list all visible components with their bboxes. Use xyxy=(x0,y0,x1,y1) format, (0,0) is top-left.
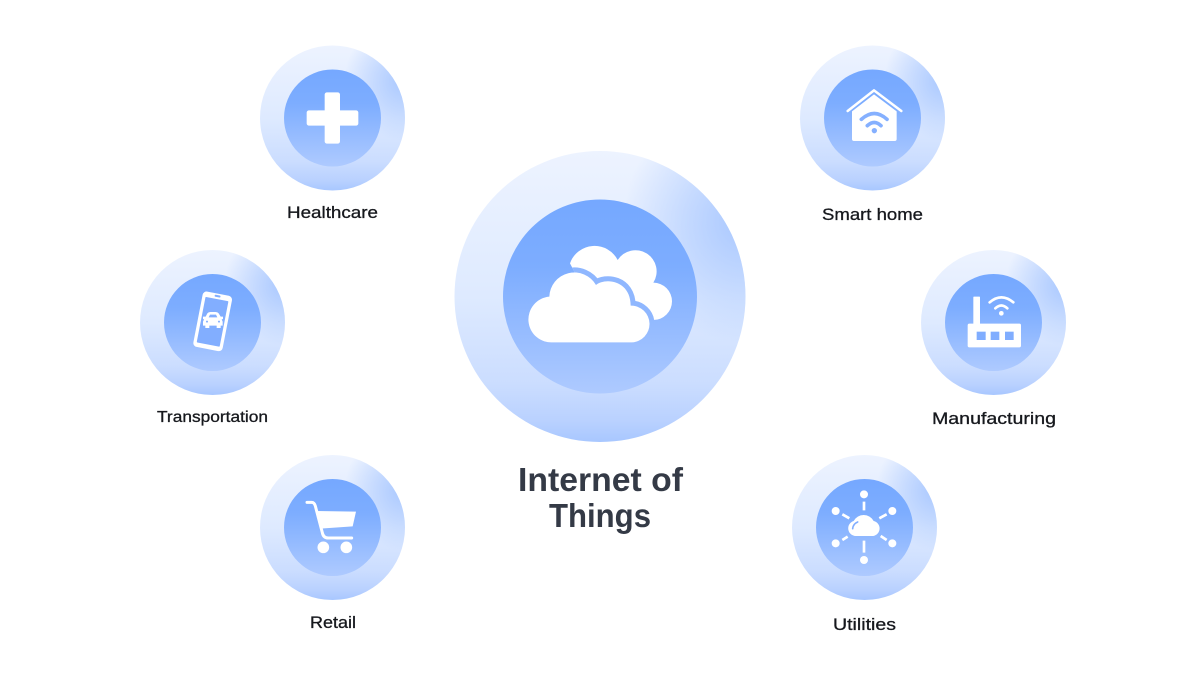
badge xyxy=(140,250,285,395)
badge xyxy=(260,46,405,190)
label: Utilities xyxy=(833,615,896,634)
panel: Smart home xyxy=(800,46,945,224)
icon: shopping cart xyxy=(307,502,356,553)
panel: Internet of Things hub xyxy=(454,151,746,534)
panel: Healthcare xyxy=(260,46,405,222)
label: Transportation xyxy=(157,409,268,426)
icon: phone with car xyxy=(193,291,233,352)
label: Retail xyxy=(310,613,356,632)
title: Internet of xyxy=(518,461,684,498)
panel: Manufacturing xyxy=(921,250,1066,428)
badge xyxy=(792,455,937,600)
icon: medical cross xyxy=(307,92,358,144)
title xyxy=(518,461,684,534)
label: Manufacturing xyxy=(932,409,1056,428)
badge xyxy=(800,46,945,190)
hub outer circle xyxy=(454,151,746,442)
icon: cloud network xyxy=(832,490,896,564)
icon: house with wifi xyxy=(848,90,901,141)
badge xyxy=(260,455,405,600)
panel: Retail xyxy=(260,455,405,632)
label: Smart home xyxy=(822,205,923,224)
badge xyxy=(921,250,1066,395)
panel: Utilities xyxy=(792,455,937,634)
label: Healthcare xyxy=(287,203,378,222)
title: Things xyxy=(549,497,651,534)
panel: Transportation xyxy=(140,250,285,426)
icon: clouds xyxy=(528,246,672,342)
icon: factory with wifi xyxy=(968,297,1021,347)
hub outer circle shading xyxy=(454,151,746,442)
hub inner circle xyxy=(503,200,697,394)
